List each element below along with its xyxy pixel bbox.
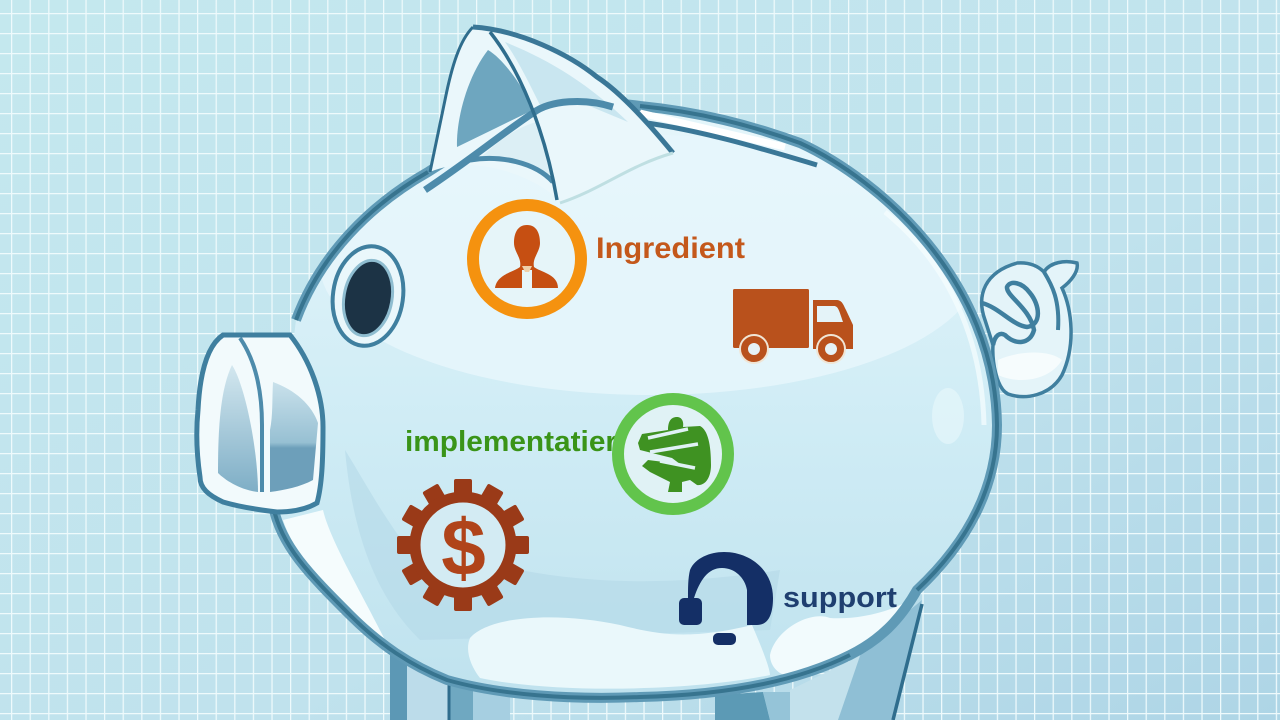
pig legs (390, 600, 922, 720)
icon: delivery truck (733, 289, 853, 363)
label: implementation: implementatier (405, 426, 617, 458)
upper highlight (322, 229, 962, 395)
left rim highlight (283, 510, 385, 640)
icon: orange person ring (473, 205, 581, 313)
icon: headset (679, 552, 773, 645)
coin slot (640, 113, 785, 147)
icon: green tools ring (618, 399, 728, 509)
right foot highlight (770, 604, 902, 674)
pig eye (326, 242, 410, 350)
body outline (273, 100, 997, 698)
label: support: support (783, 582, 897, 614)
left foot highlight (468, 617, 770, 689)
icon: dollar gear: $ (441, 503, 486, 592)
faint reflection (932, 388, 964, 444)
piggy bank illustration (197, 27, 1077, 720)
pig body (273, 100, 997, 698)
icon: dollar gear (397, 479, 529, 611)
pig ear (425, 27, 673, 203)
label: Ingredient: Ingredient (596, 232, 745, 265)
right rim highlight (885, 212, 984, 425)
glass shading inside the body (283, 135, 984, 689)
pig snout (197, 335, 323, 512)
pig tail (982, 262, 1077, 397)
left glass shade (345, 450, 780, 640)
